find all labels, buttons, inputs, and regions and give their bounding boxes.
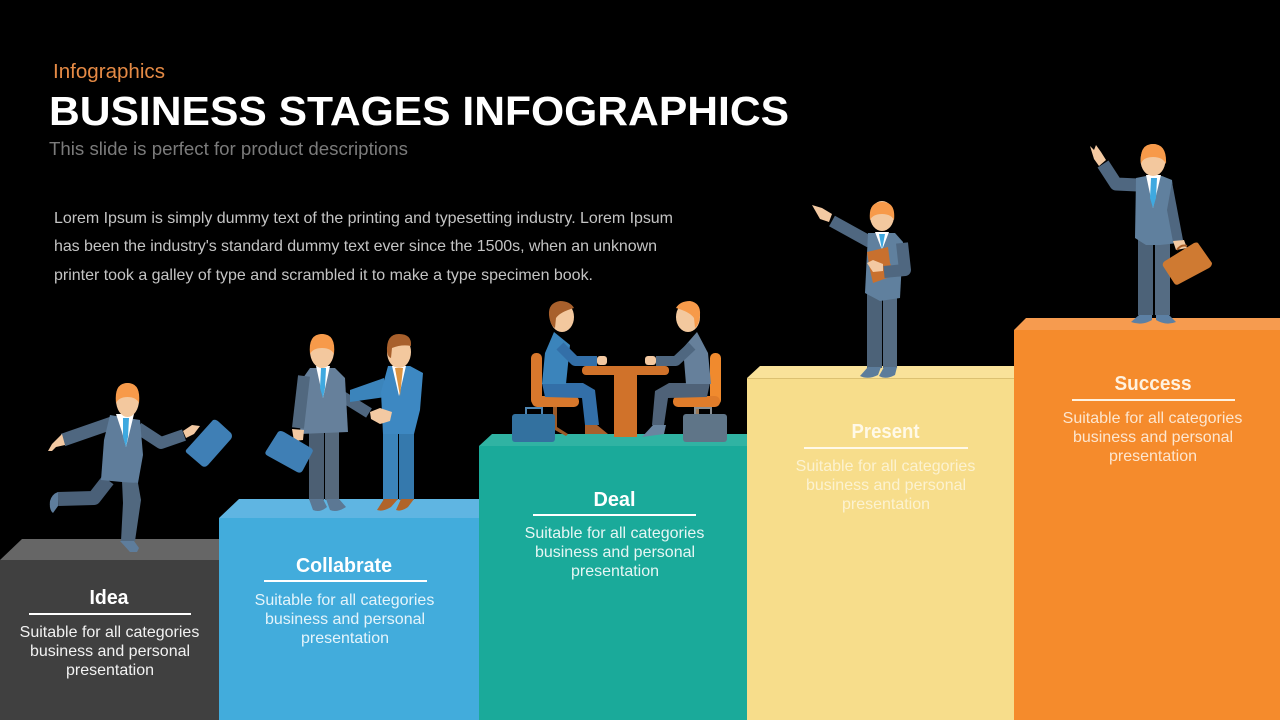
step 5 text: business and personal bbox=[1073, 429, 1233, 446]
step 3 text bbox=[525, 525, 704, 580]
figure: waving businessman with briefcase bbox=[1090, 144, 1212, 324]
step 1 heading: Idea bbox=[90, 587, 129, 609]
step 2 heading: Collabrate bbox=[296, 555, 392, 577]
chairs bbox=[531, 353, 721, 436]
figure: presenting businessman with folder bbox=[812, 201, 905, 378]
step 5: Success bbox=[1014, 318, 1280, 720]
table bbox=[582, 366, 669, 437]
subtitle: This slide is perfect for product descriptions bbox=[49, 138, 408, 159]
briefcases bbox=[512, 408, 727, 442]
figure: grey suited businessman with briefcase bbox=[265, 334, 369, 511]
step 4 text: business and personal bbox=[806, 477, 966, 494]
step 5 text bbox=[1063, 410, 1242, 465]
step 2 text: presentation bbox=[301, 630, 389, 647]
title: BUSINESS STAGES INFOGRAPHICS bbox=[49, 88, 789, 134]
step 4 text: presentation bbox=[842, 496, 930, 513]
seated man right bbox=[642, 301, 711, 437]
step 2 text: business and personal bbox=[265, 611, 425, 628]
step 4 text: Suitable for all categories bbox=[796, 458, 975, 475]
step 1 text: Suitable for all categories bbox=[20, 624, 199, 641]
step 5 heading: Success bbox=[1114, 373, 1192, 395]
step 5 text: Suitable for all categories bbox=[1063, 410, 1242, 427]
figure: running businessman with briefcase bbox=[48, 383, 232, 552]
step 2: Collabrate bbox=[219, 499, 479, 720]
figure: meeting table with two seated businessmen bbox=[512, 301, 727, 442]
eyebrow label: Infographics bbox=[53, 61, 165, 83]
step 4: Present bbox=[747, 366, 1014, 720]
figure: blue suited businessman shaking hands bbox=[350, 334, 423, 511]
step 4 text bbox=[796, 458, 975, 513]
intro paragraph bbox=[54, 210, 673, 284]
step 5 text: presentation bbox=[1109, 448, 1197, 465]
seated man left bbox=[542, 301, 608, 434]
step 3 text: business and personal bbox=[535, 544, 695, 561]
step 3 text: presentation bbox=[571, 563, 659, 580]
step 1 text: presentation bbox=[66, 662, 154, 679]
step 1: Idea bbox=[0, 539, 219, 720]
intro paragraph: has been the industry's standard dummy text ever since the 1500s, when an unknown bbox=[54, 238, 657, 255]
step 3 heading: Deal bbox=[594, 489, 636, 511]
step 3: Deal bbox=[479, 434, 747, 720]
step 4 heading: Present bbox=[852, 421, 920, 443]
step 2 text: Suitable for all categories bbox=[255, 592, 434, 609]
step 1 text: business and personal bbox=[30, 643, 190, 660]
intro paragraph: Lorem Ipsum is simply dummy text of the printing and typesetting industry. Lorem Ipsum bbox=[54, 210, 673, 227]
step 3 text: Suitable for all categories bbox=[525, 525, 704, 542]
step 2 text bbox=[255, 592, 434, 647]
intro paragraph: printer took a galley of type and scrambled it to make a type specimen book. bbox=[54, 267, 593, 284]
step 1 text bbox=[20, 624, 199, 679]
